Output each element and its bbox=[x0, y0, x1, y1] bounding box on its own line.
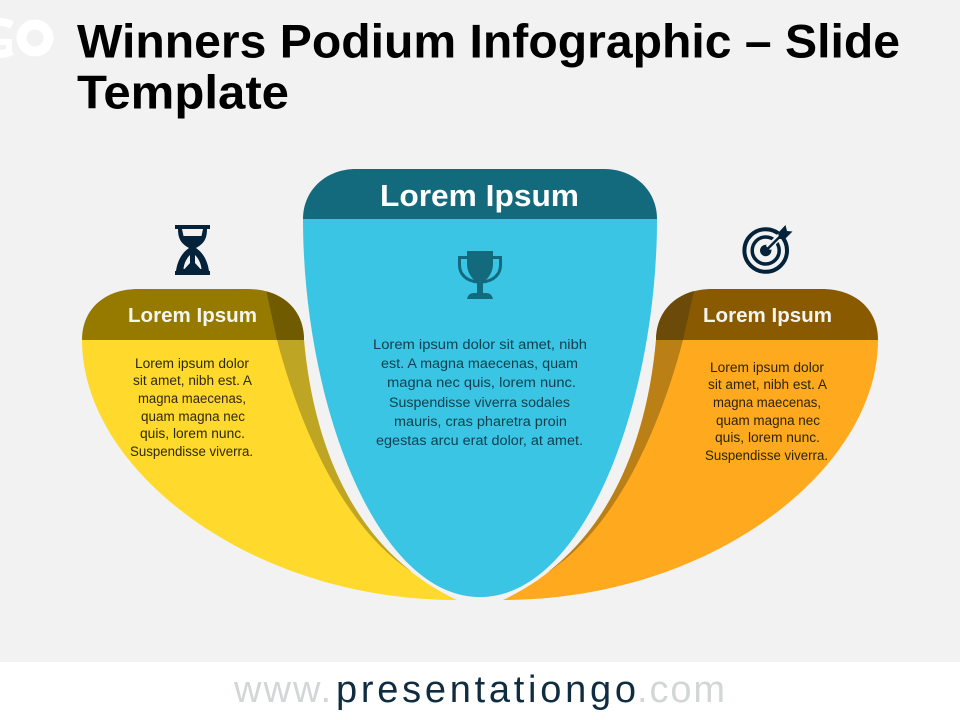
logo fragment bbox=[0, 22, 48, 54]
right shadow band bbox=[548, 340, 683, 572]
left text: Lorem ipsum dolor bbox=[135, 356, 250, 371]
footer url: .com bbox=[637, 669, 725, 711]
right heading: Lorem Ipsum bbox=[703, 305, 832, 327]
footer url: presentationgo bbox=[336, 669, 636, 711]
centre header bbox=[303, 169, 657, 219]
footer url: www. bbox=[233, 669, 331, 711]
left heading: Lorem Ipsum bbox=[128, 305, 257, 327]
left text: Suspendisse viverra. bbox=[130, 444, 253, 459]
right text: quis, lorem nunc. bbox=[715, 430, 820, 445]
left text: quis, lorem nunc. bbox=[140, 426, 245, 441]
title bbox=[77, 14, 900, 118]
right text: quam magna nec bbox=[716, 413, 820, 428]
footer band bbox=[0, 662, 960, 720]
centre text: Suspendisse viverra sodales bbox=[389, 395, 570, 410]
right header bbox=[656, 289, 878, 340]
icon: trophy bbox=[460, 251, 500, 299]
left text: magna maecenas, bbox=[138, 391, 246, 406]
right text: Suspendisse viverra. bbox=[705, 448, 828, 463]
title: Template bbox=[77, 66, 289, 118]
left header shadow bbox=[266, 291, 304, 340]
centre text bbox=[373, 337, 587, 448]
right text bbox=[705, 360, 828, 463]
centre text: est. A magna maecenas, quam bbox=[381, 356, 578, 371]
panel: right podium bbox=[503, 289, 878, 600]
centre text: mauris, cras pharetra proin bbox=[394, 414, 567, 429]
right text: magna maecenas, bbox=[713, 395, 821, 410]
centre heading: Lorem Ipsum bbox=[380, 178, 579, 213]
centre body bbox=[303, 219, 657, 597]
icon: hourglass bbox=[175, 225, 210, 275]
centre text: magna nec quis, lorem nunc. bbox=[387, 375, 576, 390]
centre text: Lorem ipsum dolor sit amet, nibh bbox=[373, 337, 587, 352]
right text: Lorem ipsum dolor bbox=[710, 360, 825, 375]
panel: left podium bbox=[82, 285, 457, 600]
left body bbox=[82, 340, 457, 600]
panel: centre podium bbox=[303, 169, 657, 597]
left shadow band bbox=[277, 340, 412, 572]
right text: sit amet, nibh est. A bbox=[708, 377, 827, 392]
icon: target bbox=[744, 225, 792, 272]
left header bbox=[82, 289, 304, 340]
left text: sit amet, nibh est. A bbox=[133, 373, 252, 388]
centre text: egestas arcu erat dolor, at amet. bbox=[376, 433, 583, 448]
right body bbox=[503, 340, 878, 600]
left text: quam magna nec bbox=[141, 409, 245, 424]
left text bbox=[130, 356, 253, 459]
title: Winners Podium Infographic – Slide bbox=[77, 14, 900, 68]
right header shadow bbox=[656, 291, 694, 340]
footer url bbox=[233, 669, 725, 711]
